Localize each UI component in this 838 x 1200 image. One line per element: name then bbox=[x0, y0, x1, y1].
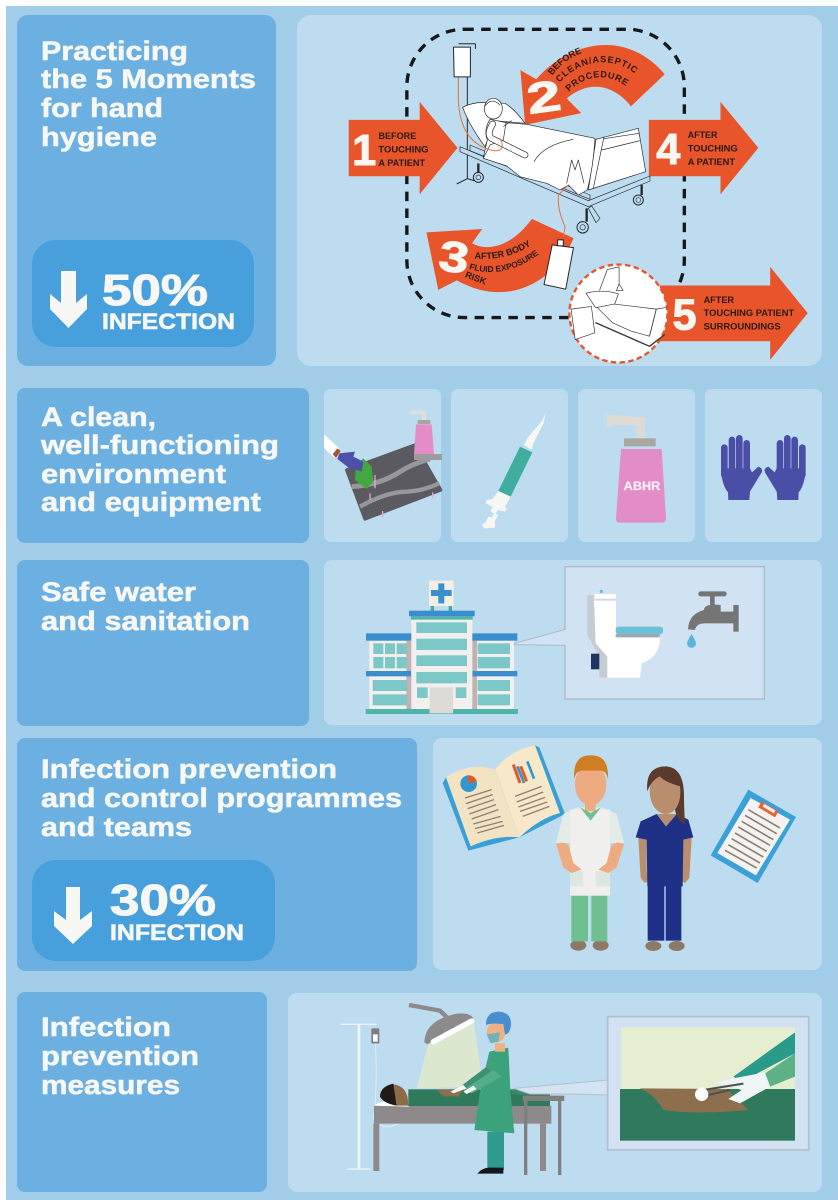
icon: clipboard bbox=[711, 790, 796, 883]
arrow: moment 3 after body fluid exposure risk: 3 bbox=[436, 232, 472, 284]
icon: down arrow bbox=[50, 271, 87, 328]
icon: water drop bbox=[687, 634, 696, 648]
callout: 50% infection reduction bbox=[32, 240, 254, 347]
icon: cleaning a surface bbox=[324, 412, 442, 519]
figure: surgeon bbox=[451, 1012, 514, 1174]
icon: alcohol-based hand rub bottle: ABHR bbox=[624, 479, 661, 493]
panel: hospital with sanitation callout bbox=[324, 560, 822, 725]
arrow: moment 3 after body fluid exposure risk: FLUID EXPOSURE bbox=[470, 250, 538, 272]
arrow: moment 5 after touching patient surroundings: AFTER bbox=[704, 295, 734, 305]
arrow: moment 5 after touching patient surroundings: TOUCHING PATIENT bbox=[704, 308, 795, 318]
arrow: moment 1 before touching a patient: TOUCHING bbox=[378, 144, 428, 154]
arrow: moment 3 after body fluid exposure risk bbox=[426, 178, 614, 330]
urine bag bbox=[544, 240, 573, 289]
icon: syringe bbox=[482, 412, 546, 528]
IV bag bbox=[453, 44, 475, 77]
illustration: patient in bed with IV and catheter bbox=[457, 55, 650, 237]
heading: infection prevention measures: measures bbox=[41, 1070, 180, 1100]
heading: safe water and sanitation bbox=[41, 577, 250, 636]
arrow: moment 5 after touching patient surroundings bbox=[569, 265, 808, 363]
heading: practicing the 5 moments: hygiene bbox=[41, 122, 157, 152]
icon: gloves bbox=[721, 438, 806, 500]
heading: clean environment and equipment: environment bbox=[41, 459, 226, 489]
arrow: moment 1 before touching a patient: 1 bbox=[352, 127, 376, 175]
arrow: moment 1 before touching a patient: A PATIENT bbox=[378, 158, 426, 168]
heading: safe water and sanitation: and sanitation bbox=[41, 606, 250, 636]
callout: 30% infection reduction bbox=[32, 860, 275, 961]
heading: infection prevention measures bbox=[41, 1012, 199, 1100]
arrow: moment 2 before clean/aseptic procedure: BEFORE bbox=[548, 47, 582, 75]
heading: practicing the 5 moments: the 5 Moments bbox=[41, 64, 256, 94]
arrow: moment 1 before touching a patient bbox=[349, 102, 458, 194]
heading: clean environment and equipment bbox=[40, 402, 279, 517]
heading: infection prevention and control programmes and teams bbox=[41, 754, 402, 842]
callout: toilet and tap bbox=[514, 567, 764, 699]
panel: 5 moments diagram bbox=[297, 15, 822, 366]
label: infection: INFECTION bbox=[110, 920, 244, 945]
heading: infection prevention and control programmes and teams: and teams bbox=[41, 812, 192, 842]
dashed patient zone bbox=[407, 29, 684, 318]
side table bbox=[512, 1090, 564, 1175]
section: clean environment text panel bbox=[17, 388, 309, 543]
heading: practicing the 5 moments: for hand bbox=[41, 93, 163, 123]
arrow: moment 4 after touching a patient: TOUCHING bbox=[688, 143, 738, 153]
arrow: moment 2 before clean/aseptic procedure: CLEAN/ASEPTIC bbox=[556, 56, 638, 82]
arrow: moment 4 after touching a patient bbox=[649, 102, 758, 194]
heading: infection prevention and control programmes and teams: and control programmes bbox=[41, 783, 402, 813]
label: infection: INFECTION bbox=[102, 309, 235, 334]
heading: practicing the 5 moments: Practicing bbox=[41, 36, 188, 66]
icon: down arrow bbox=[54, 887, 92, 944]
icon: dripping tap bbox=[687, 591, 739, 648]
section: safe water text panel bbox=[17, 560, 309, 726]
heading: practicing the 5 moments bbox=[41, 36, 256, 152]
surgical lamp bbox=[409, 1005, 483, 1088]
arrow: moment 4 after touching a patient: 4 bbox=[656, 126, 680, 174]
arrow: moment 1 before touching a patient: BEFORE bbox=[378, 131, 416, 141]
arrow: moment 3 after body fluid exposure risk: RISK bbox=[465, 271, 487, 285]
panel: IPC team illustration bbox=[433, 738, 822, 970]
arrow: moment 5 after touching patient surroundings: 5 bbox=[673, 292, 697, 340]
sheet and footboard bbox=[463, 98, 646, 195]
icon: hospital building bbox=[366, 581, 518, 714]
icon: open book bbox=[443, 745, 565, 851]
heading: clean environment and equipment: A clean, bbox=[41, 402, 156, 432]
zoom wedge bbox=[513, 1080, 608, 1095]
arrow: moment 4 after touching a patient: AFTER bbox=[688, 130, 718, 140]
section: IPC programmes text panel bbox=[17, 738, 417, 971]
figure: nurse bbox=[636, 766, 693, 951]
heading: infection prevention measures: Infection bbox=[41, 1012, 171, 1042]
heading: clean environment and equipment: and equipment bbox=[41, 487, 261, 517]
heading: safe water and sanitation: Safe water bbox=[41, 577, 197, 607]
panel: equipment cards bbox=[324, 389, 822, 542]
operating table and patient bbox=[373, 1084, 551, 1171]
section: 5 moments text panel bbox=[17, 15, 276, 366]
section: infection prevention measures text panel bbox=[17, 992, 267, 1192]
icon: alcohol-based hand rub bottle bbox=[607, 414, 666, 523]
inset: patient surroundings circle bbox=[569, 265, 667, 363]
arrow: moment 2 before clean/aseptic procedure: PROCEDURE bbox=[565, 70, 629, 92]
callout: wound cleaning close-up bbox=[608, 1017, 809, 1150]
icon: toilet bbox=[587, 590, 663, 678]
IV stand bbox=[341, 1024, 408, 1169]
IV tube bbox=[458, 70, 502, 151]
statistic: 30%: 30% bbox=[110, 876, 216, 925]
bed frame bbox=[457, 55, 650, 233]
arrow: moment 2 before clean/aseptic procedure bbox=[520, 45, 665, 124]
statistic: 50%: 50% bbox=[102, 266, 208, 315]
arrow: moment 5 after touching patient surroundings: SURROUNDINGS bbox=[704, 322, 781, 332]
heading: infection prevention measures: prevention bbox=[41, 1041, 199, 1071]
arrow: moment 2 before clean/aseptic procedure: 2 bbox=[524, 72, 564, 124]
arrow: moment 4 after touching a patient: A PATIENT bbox=[688, 157, 735, 167]
arrow: moment 3 after body fluid exposure risk: AFTER BODY bbox=[474, 240, 529, 259]
heading: clean environment and equipment: well-functioning bbox=[40, 430, 279, 460]
panel: surgery illustration bbox=[288, 993, 822, 1192]
heading: infection prevention and control programmes and teams: Infection prevention bbox=[41, 754, 337, 784]
catheter tube bbox=[558, 185, 568, 237]
figure: doctor bbox=[556, 755, 624, 951]
